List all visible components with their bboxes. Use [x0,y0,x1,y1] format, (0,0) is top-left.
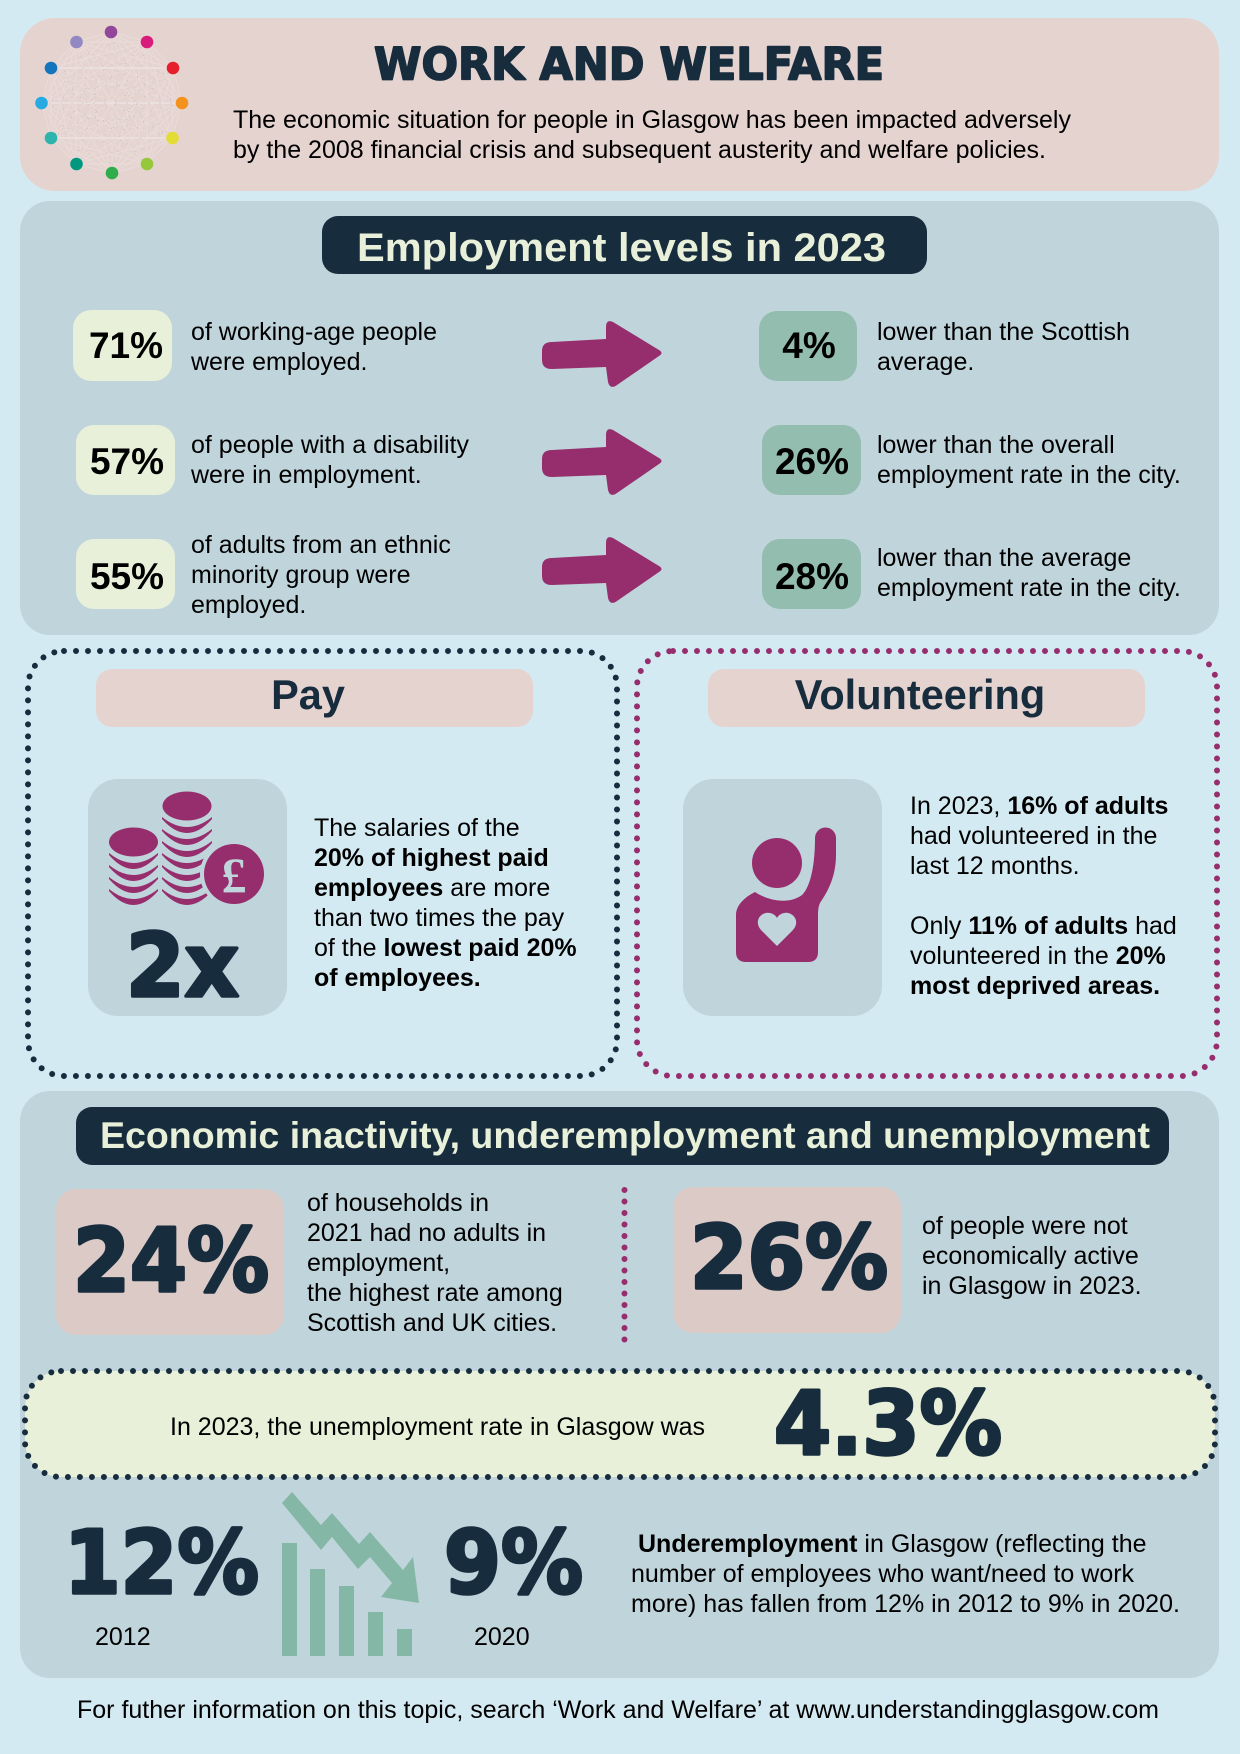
row 2 arrow [542,429,662,495]
heading: pay [96,669,533,727]
row 1 arrow [542,321,662,387]
row 3 arrow [542,537,662,603]
card: 24 percent [56,1189,284,1335]
text: underemployment: Underemployment [638,1530,858,1558]
volunteering text: had volunteered in the [910,822,1157,850]
card: 26 percent [673,1187,901,1333]
row 3 text: employed. [191,591,306,619]
row 1 text: of working-age people [191,318,437,346]
intro text: by the 2008 financial crisis and subsequent austerity and welfare policies. [233,136,1046,164]
stat: 12 percent in 2012: 2012 [95,1623,151,1651]
pay text: employees are more [314,874,550,902]
panel: economic inactivity, underemployment and unemployment [20,1091,1219,1678]
row 3 comparison text: employment rate in the city. [877,574,1181,602]
text: underemployment: number of employees who want/need to work [631,1560,1135,1588]
text: not economically active: of people were not [922,1212,1128,1240]
row 3: 28 percent badge [762,539,861,609]
row 1: 4 percent badge: 4% [782,325,836,366]
stat: 9 percent in 2020: 9% [444,1512,583,1614]
heading: economic inactivity [76,1107,1169,1165]
card: 26 percent: 26% [690,1207,888,1309]
pay text: The salaries of the [314,814,520,842]
text: underemployment: more) has fallen from 12% in 2012 to 9% in 2020. [631,1590,1180,1618]
text: households: 2021 had no adults in [307,1219,546,1247]
volunteering text: last 12 months. [910,852,1080,880]
heading: volunteering [708,669,1145,727]
pay text: than two times the pay [314,904,565,932]
pay text: of employees. [314,964,481,992]
panel: volunteering [637,651,1217,1076]
row 2 comparison text: lower than the overall [877,431,1115,459]
text: households: employment, [307,1249,450,1277]
text: households: the highest rate among [307,1279,563,1307]
icon: coin stacks with pound: £ [222,847,246,903]
row 1: 4 percent badge [759,311,857,381]
row 2: 57 percent badge: 57% [90,441,164,482]
text: not economically active: economically active [922,1242,1139,1270]
intro text: The economic situation for people in Glasgow has been impacted adversely [233,106,1071,134]
card: pay icon and 2x [88,779,287,1017]
row 2 text: of people with a disability [191,431,469,459]
row 2: 26 percent badge: 26% [775,441,849,482]
text: not economically active: in Glasgow in 2023. [922,1272,1142,1300]
card: 24 percent: 24% [73,1210,269,1312]
row 2 text: were in employment. [190,461,422,489]
row 3 text: of adults from an ethnic [191,531,451,559]
row 3 text: minority group were [191,561,411,589]
text: households: of households in [307,1189,489,1217]
footer: For futher information on this topic, search ‘Work and Welfare’ at www.understandingglasgow.com [77,1696,1159,1724]
row 1: 71 percent badge [73,310,172,381]
row 1 comparison text: lower than the Scottish [877,318,1130,346]
volunteering text: Only 11% of adults had [910,912,1177,940]
text: households: Scottish and UK cities. [307,1309,557,1337]
panel: header [20,18,1219,191]
title: WORK AND WELFARE [374,40,884,90]
pay text: 20% of highest paid [314,844,549,872]
text: underemployment: in Glasgow (reflecting the [857,1530,1147,1558]
chart: falling bars and arrow [282,1492,419,1656]
row 2: 26 percent badge [762,425,861,495]
volunteering text: most deprived areas. [910,972,1160,1000]
callout: unemployment rate: 4.3% [774,1373,1002,1475]
multiplier: 2x [126,915,239,1017]
volunteering text: In 2023, 16% of adults [910,792,1168,820]
heading: employment levels: Employment levels in 2023 [357,226,886,270]
icon: person with raised arm and heart [736,828,836,962]
heading: volunteering: Volunteering [795,671,1045,718]
panel: employment levels [20,201,1219,635]
row 1 comparison text: average. [877,348,974,376]
heading: pay: Pay [271,671,345,718]
row 3: 55 percent badge: 55% [90,556,164,597]
icon: network wheel [35,26,188,179]
callout: unemployment rate: In 2023, the unemployment rate in Glasgow was [170,1413,705,1441]
stat: 9 percent in 2020: 2020 [474,1623,530,1651]
row 3: 55 percent badge [76,539,175,609]
row 1 text: were employed. [190,348,367,376]
row 2 comparison text: employment rate in the city. [877,461,1181,489]
stat: 12 percent in 2012: 12% [64,1512,259,1614]
stat: 12 percent in 2012 [64,1512,259,1651]
pay text: of the lowest paid 20% [314,934,577,962]
row 2: 57 percent badge [76,425,175,495]
callout: unemployment rate [25,1371,1215,1477]
row 1: 71 percent badge: 71% [89,325,163,366]
heading: employment levels [322,216,927,274]
volunteering text: volunteered in the 20% [910,942,1166,970]
icon: coin stacks with pound [109,792,268,908]
heading: economic inactivity: Economic inactivity, underemployment and unemployment [100,1115,1150,1156]
row 3: 28 percent badge: 28% [775,556,849,597]
panel: pay [28,651,617,1076]
card: volunteer icon [683,779,882,1016]
row 3 comparison text: lower than the average [877,544,1131,572]
